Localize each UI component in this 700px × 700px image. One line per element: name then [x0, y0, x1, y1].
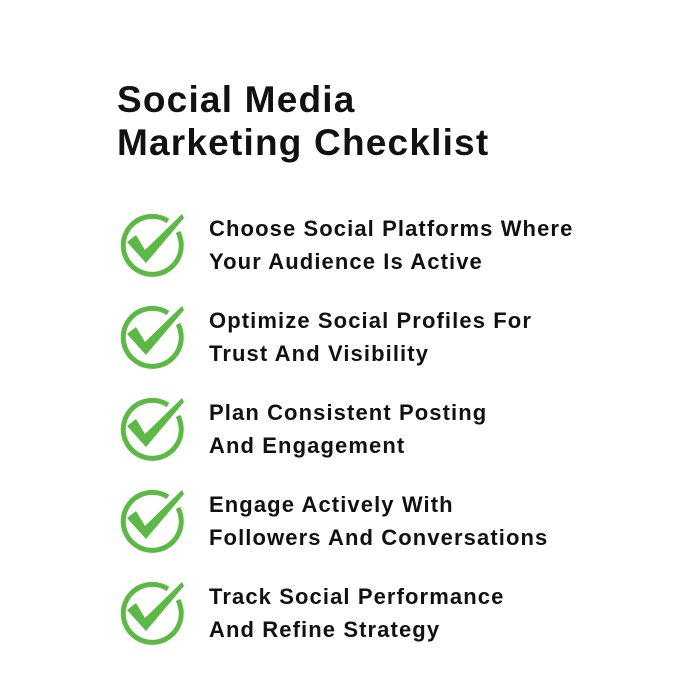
- icon: check: [120, 214, 184, 277]
- item 2: [120, 306, 532, 369]
- item 5: Track Social Performance: [209, 584, 504, 609]
- item 1: [120, 214, 573, 277]
- item 4: Followers And Conversations: [209, 525, 548, 550]
- item 3: Plan Consistent Posting: [209, 400, 487, 425]
- item 4: [120, 490, 548, 553]
- icon: check: [120, 398, 184, 461]
- item 5: And Refine Strategy: [209, 617, 440, 642]
- item 5: [120, 582, 504, 645]
- title: Social Media: [117, 79, 356, 120]
- icon: check: [120, 582, 184, 645]
- title: Marketing Checklist: [117, 122, 489, 163]
- item 1: Choose Social Platforms Where: [209, 216, 573, 241]
- item 3: And Engagement: [209, 433, 405, 458]
- icon: check: [120, 306, 184, 369]
- item 4: Engage Actively With: [209, 492, 454, 517]
- item 3: [120, 398, 487, 461]
- item 1: Your Audience Is Active: [209, 249, 483, 274]
- icon: check: [120, 490, 184, 553]
- item 2: Trust And Visibility: [209, 341, 429, 366]
- title: [117, 79, 489, 163]
- item 2: Optimize Social Profiles For: [209, 308, 532, 333]
